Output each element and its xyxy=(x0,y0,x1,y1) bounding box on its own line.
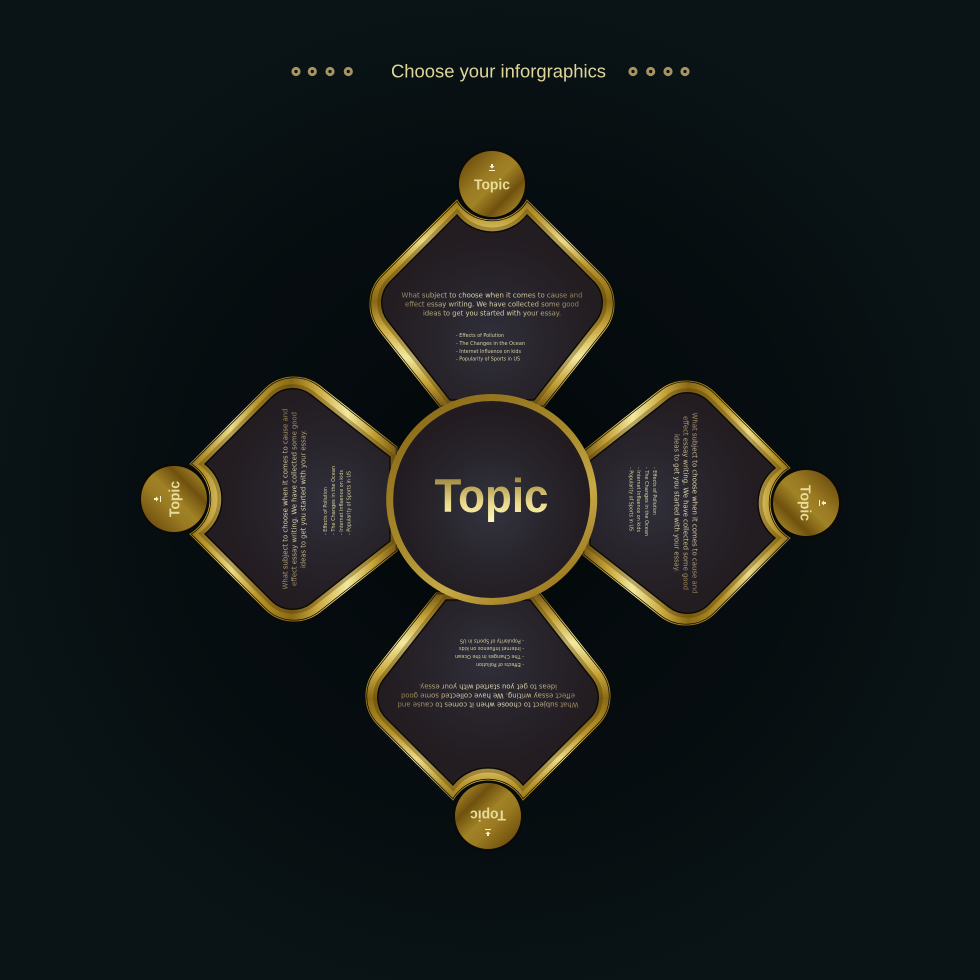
panel: top xyxy=(370,148,614,407)
body text: effect essay writing. We have collected some good xyxy=(290,412,298,586)
bullet list: - Internet Influence on kids xyxy=(339,470,345,535)
bullet list: - Popularity of Sports in US xyxy=(460,638,524,644)
body text xyxy=(398,682,578,708)
bullet list: - Popularity of Sports in US xyxy=(456,356,520,362)
badge xyxy=(770,468,842,538)
icon: download xyxy=(154,496,161,502)
gold frame xyxy=(190,377,397,621)
bullet list: - Popularity of Sports in US xyxy=(346,471,352,535)
bullet list: - Effects of Pollution xyxy=(476,661,524,667)
bullet list: - Internet Influence on kids xyxy=(459,645,524,651)
bullet list: - Internet Influence on kids xyxy=(456,349,521,355)
badge: Topic xyxy=(796,485,814,521)
bullet list: - Internet Influence on kids xyxy=(635,467,641,532)
gold frame xyxy=(370,200,614,407)
gold frame xyxy=(366,593,610,800)
badge xyxy=(138,464,210,534)
body text: What subject to choose when it comes to cause and xyxy=(398,700,578,708)
badge: Topic xyxy=(470,806,506,824)
body text xyxy=(402,292,582,318)
badge: Topic xyxy=(166,481,184,517)
bullet list xyxy=(628,467,657,536)
badge xyxy=(452,780,524,852)
header xyxy=(293,62,688,82)
bullet list xyxy=(456,333,525,362)
bullet list: - The Changes in the Ocean xyxy=(331,466,337,535)
icon: download xyxy=(819,500,826,506)
body text: effect essay writing. We have collected some good xyxy=(682,416,690,590)
icon: download xyxy=(489,164,495,171)
bullet list: - The Changes in the Ocean xyxy=(643,467,649,536)
right dot row xyxy=(630,68,688,75)
body text: effect essay writing. We have collected some good xyxy=(401,692,575,700)
body text: ideas to get you started with your essay. xyxy=(300,430,308,568)
icon: download xyxy=(485,829,491,836)
gold frame xyxy=(583,381,790,625)
bullet list: - Effects of Pollution xyxy=(651,467,657,515)
bullet list: - Effects of Pollution xyxy=(456,333,504,339)
left dot row xyxy=(293,68,351,75)
central hub xyxy=(390,398,594,602)
body text xyxy=(282,408,308,590)
body text: What subject to choose when it comes to cause and xyxy=(402,292,582,300)
body text: ideas to get you started with your essay. xyxy=(423,310,561,318)
bullet list xyxy=(323,466,352,535)
panel: right xyxy=(583,381,842,625)
bullet list: - Effects of Pollution xyxy=(323,487,329,535)
title: Choose your inforgraphics xyxy=(391,62,606,82)
bullet list: - The Changes in the Ocean xyxy=(455,653,524,659)
bullet list: - Popularity of Sports in US xyxy=(628,467,634,531)
bullet list xyxy=(455,638,524,667)
body text: effect essay writing. We have collected some good xyxy=(405,300,579,308)
panel: bottom xyxy=(366,593,610,852)
panel: left xyxy=(138,377,397,621)
body text: ideas to get you started with your essay. xyxy=(672,434,680,572)
badge xyxy=(456,148,528,220)
body text: What subject to choose when it comes to cause and xyxy=(690,412,698,594)
body text xyxy=(672,412,698,594)
bullet list: - The Changes in the Ocean xyxy=(456,341,525,347)
badge: Topic xyxy=(474,176,510,194)
body text: What subject to choose when it comes to cause and xyxy=(282,408,290,590)
body text: ideas to get you started with your essay. xyxy=(419,682,557,690)
hub title: Topic xyxy=(434,469,548,522)
